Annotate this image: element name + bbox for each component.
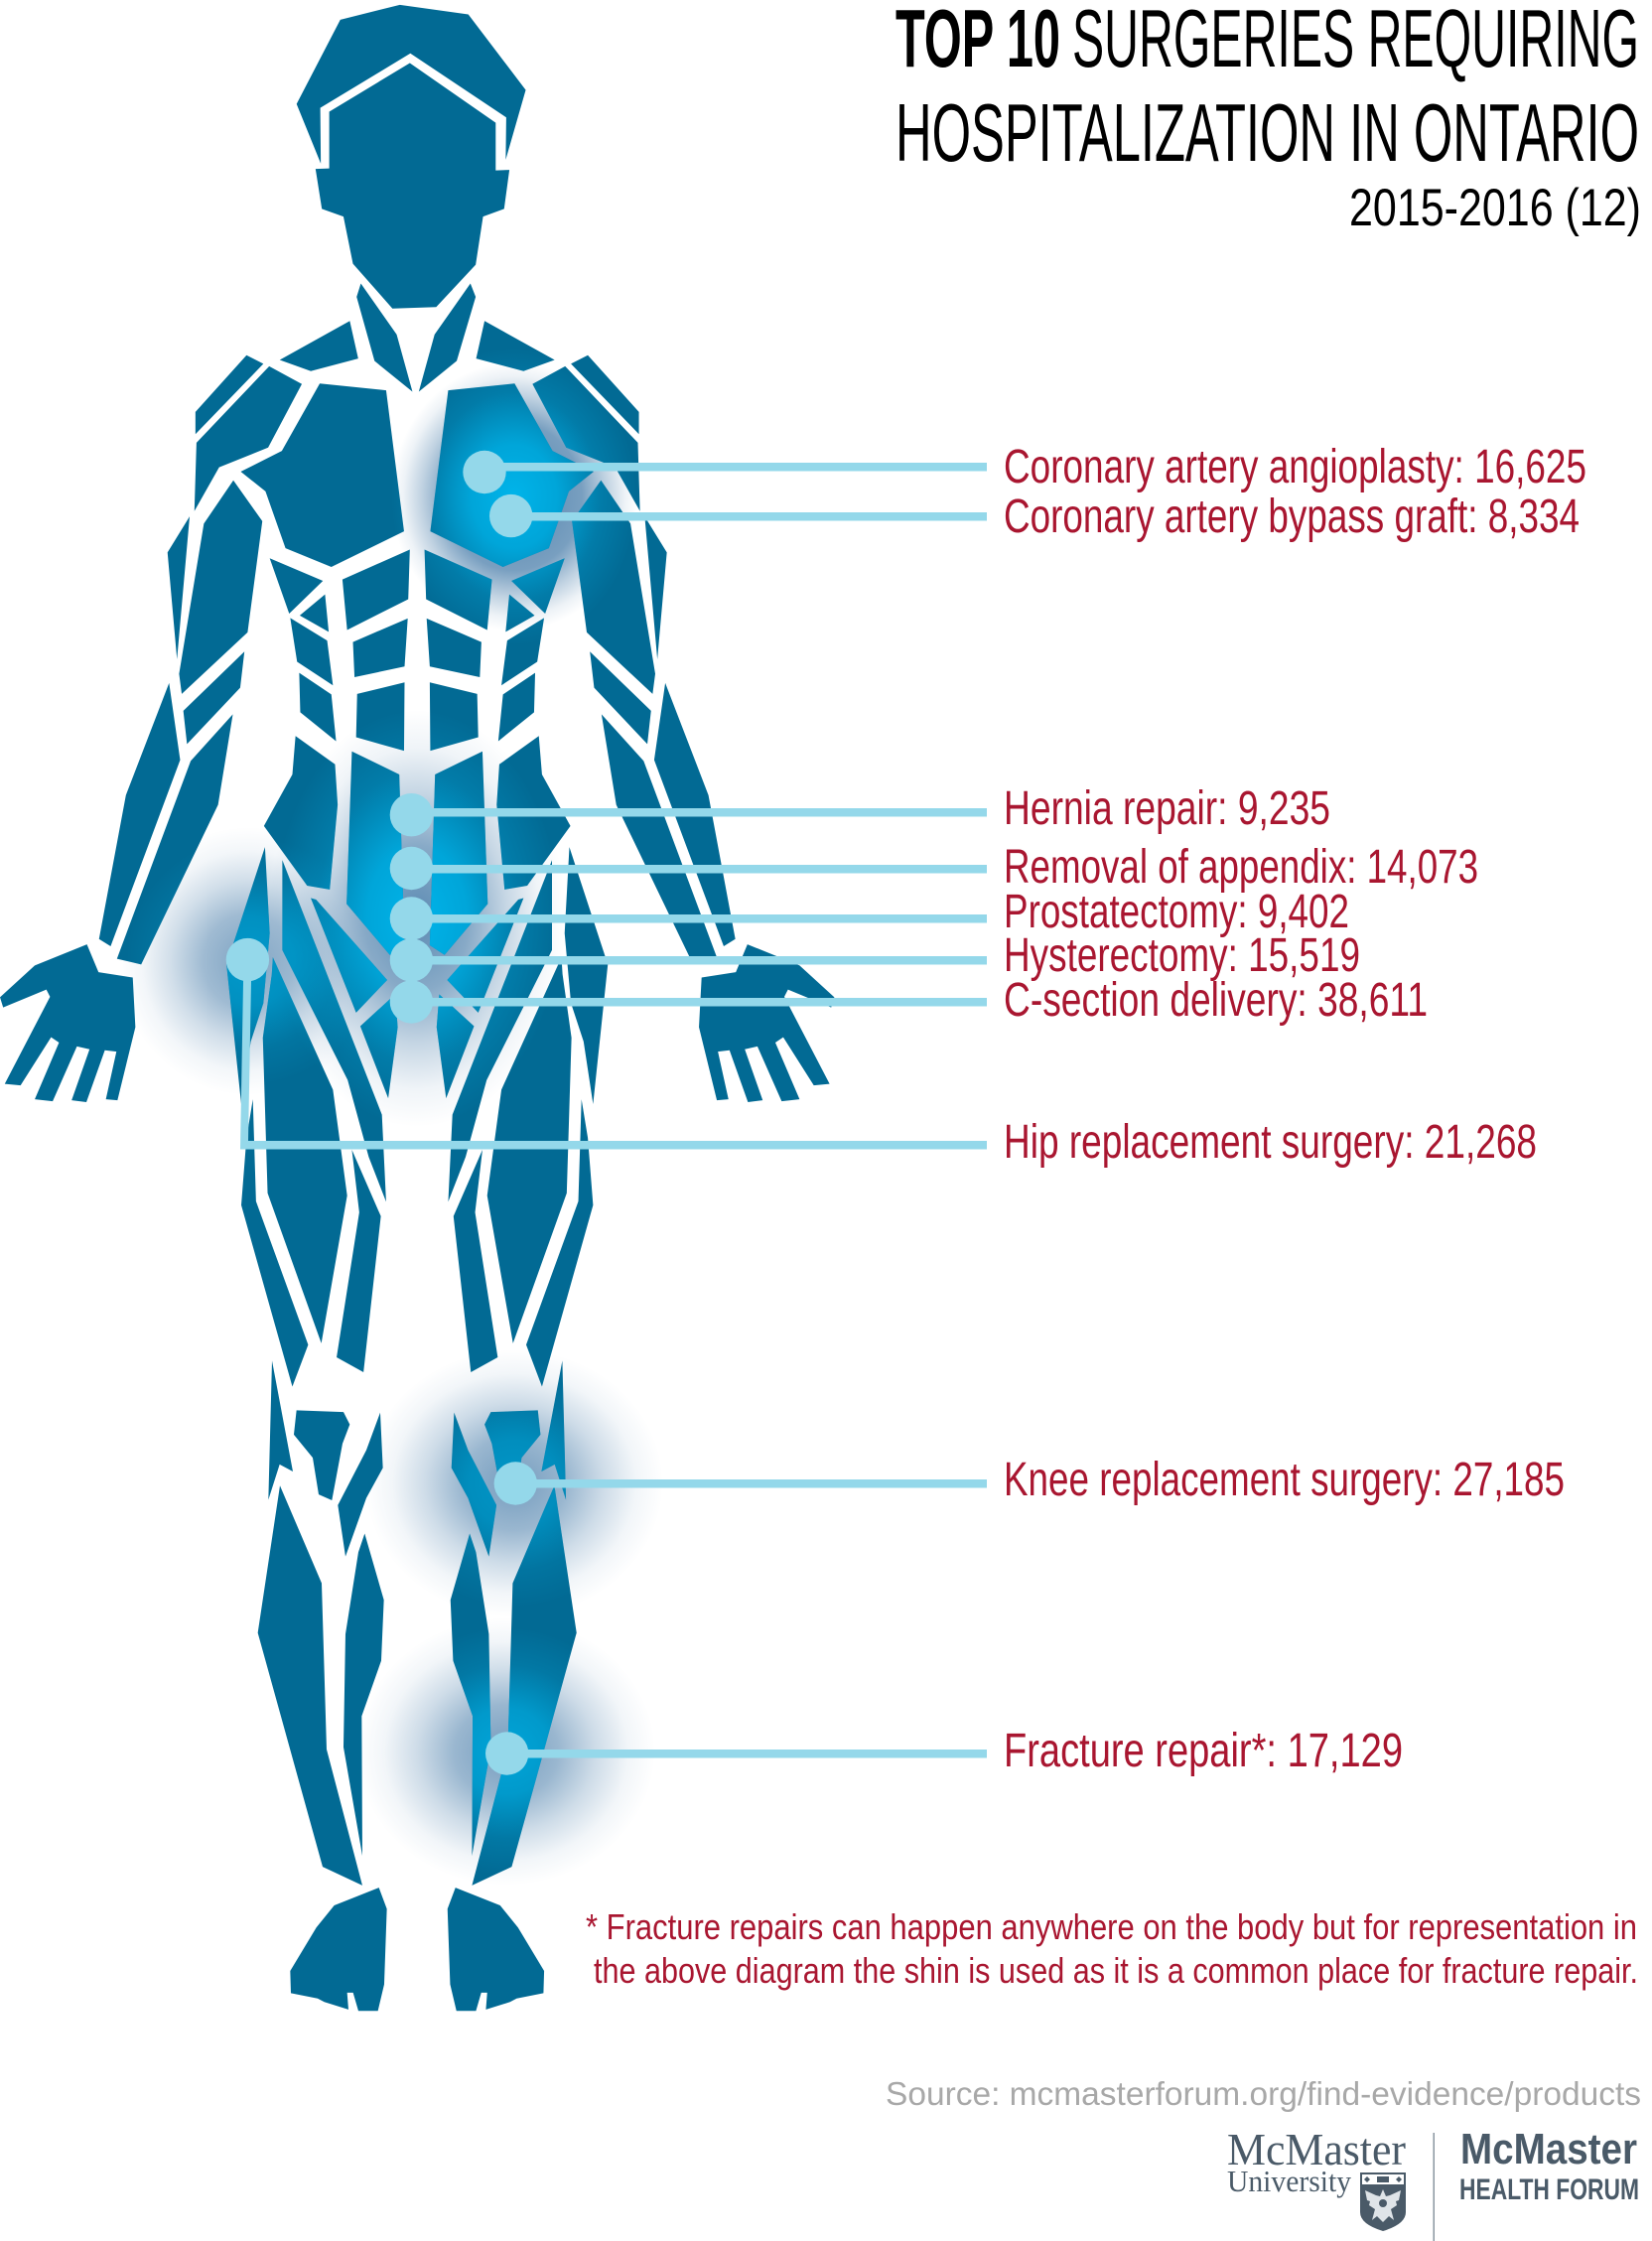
connector lines and location dots [226,451,987,1775]
source line: Source: mcmasterforum.org/find-evidence/products [886,2075,1641,2112]
dot and line: coronary artery bypass graft [489,494,987,537]
title [895,0,1641,237]
dot and line: hysterectomy [390,938,987,982]
glow halos behind the body [119,362,663,1886]
dot and line: removal of appendix [390,847,987,890]
dot and line: hip replacement surgery [226,938,987,1150]
dot and line: c-section delivery [390,980,987,1024]
surgery labels: Prostatectomy: 9,402 [1004,886,1349,938]
human body figure [0,5,834,2011]
dot and line: hernia repair [390,793,987,836]
surgery labels: Removal of appendix: 14,073 [1004,841,1478,894]
icon: university crest [1360,2172,1406,2231]
surgery labels: Hernia repair: 9,235 [1004,782,1330,835]
logo: McMaster University: McMaster [1227,2124,1406,2174]
dot and line: fracture repair [485,1732,987,1775]
bright highlights on the body [126,348,643,1876]
dot and line: prostatectomy [390,897,987,940]
logo: McMaster University [1227,2124,1406,2231]
logo: McMaster Health Forum [1459,2125,1639,2206]
footnote [586,1906,1638,1991]
logo divider [1434,2133,1435,2241]
surgery labels: Fracture repair*: 17,129 [1004,1725,1403,1777]
dot and line: knee replacement surgery [494,1462,987,1505]
surgery labels: Hysterectomy: 15,519 [1004,929,1360,982]
surgery labels [1004,441,1586,1777]
surgery labels: C-section delivery: 38,611 [1004,974,1428,1027]
logo: McMaster University: University [1227,2164,1351,2198]
dot and line: coronary artery angioplasty [463,451,987,493]
